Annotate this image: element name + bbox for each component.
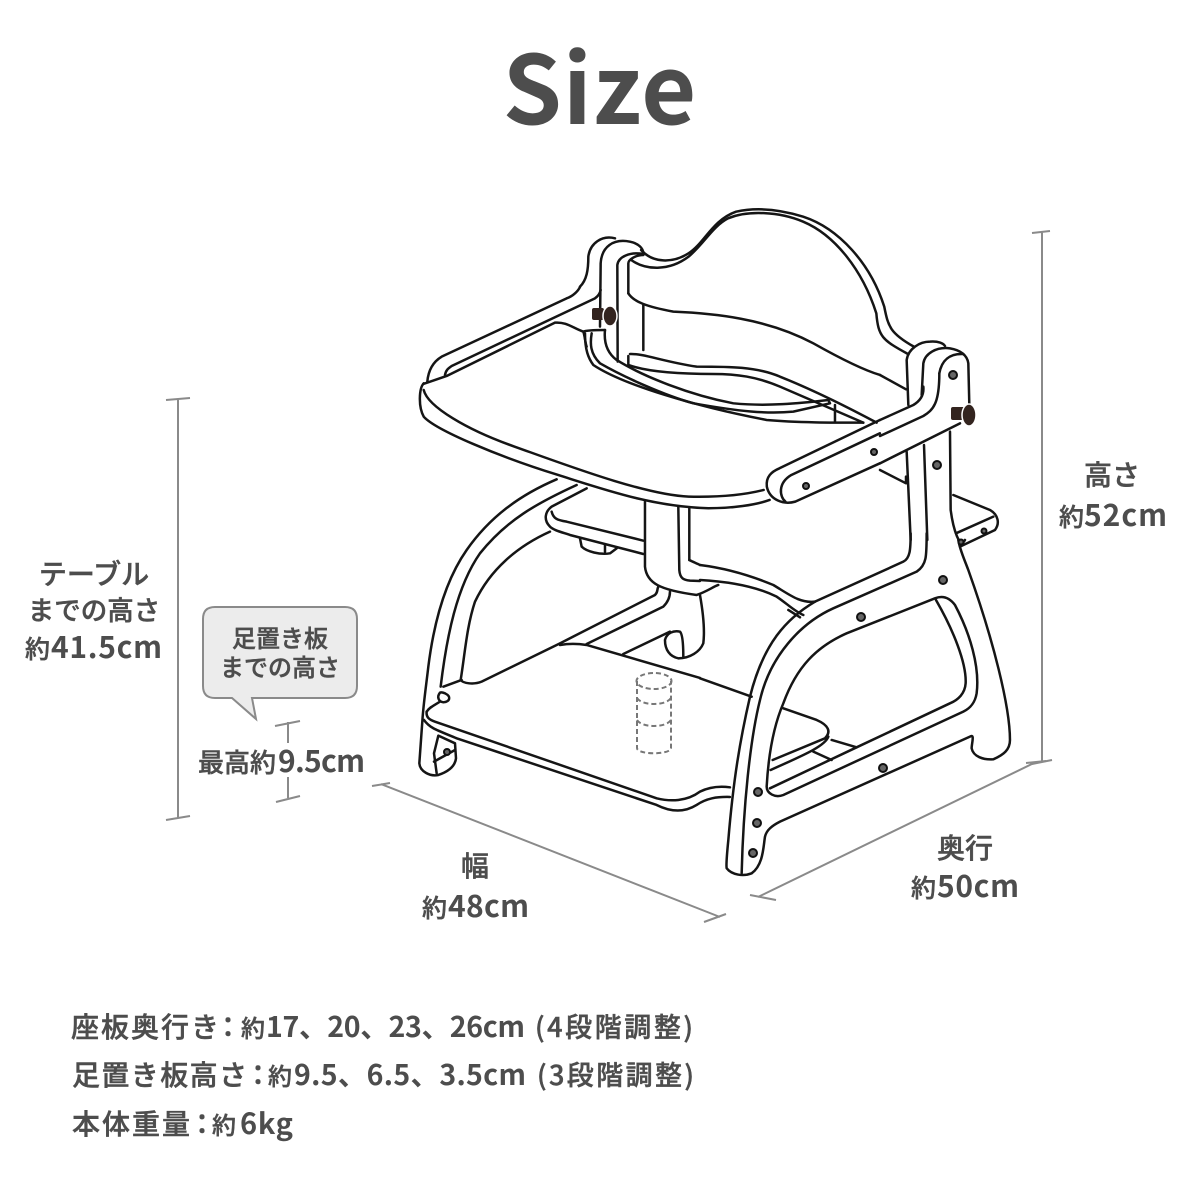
spec list line 1: 約 (241, 1009, 265, 1044)
spec list line 2: 9.5、6.5、3.5cm (294, 1053, 526, 1094)
right leg (700, 533, 1010, 875)
label: table height (25, 553, 162, 667)
label: table height: 約 (25, 630, 50, 666)
label: table height: までの高さ (28, 589, 160, 628)
backrest and tray outline (420, 209, 914, 508)
label: footboard max height: 9.5cm (278, 737, 365, 781)
right post and arm rail (880, 342, 998, 547)
label: width (422, 845, 529, 926)
label: depth: 奥行 (937, 827, 993, 867)
left post and seat belt (580, 238, 880, 423)
dimension line: width (372, 783, 726, 922)
label: depth: 50cm (937, 862, 1019, 906)
spec list line 2: 約 (268, 1057, 292, 1092)
left leg, center column and footboard (419, 479, 730, 811)
speech bubble (203, 607, 357, 719)
label: height: 高さ (1084, 454, 1140, 494)
title: Size (503, 15, 697, 152)
spec list line 2: (3段階調整) (537, 1054, 694, 1093)
spec list line 3: 約 (212, 1106, 236, 1141)
label: footboard max height: 最高約 (198, 743, 276, 780)
label: height: 52cm (1084, 491, 1167, 535)
label: width: 幅 (461, 845, 489, 885)
dimension line: depth (750, 761, 1046, 900)
dimension line: table height (166, 398, 190, 820)
spec list line 1: (4段階調整) (535, 1006, 693, 1045)
spec list line 3 (72, 1101, 293, 1143)
spec list line 2 (72, 1053, 694, 1094)
label: depth (911, 827, 1019, 906)
spec list line 3: ： (188, 1103, 216, 1143)
spec list line 3: 6kg (240, 1101, 293, 1143)
label: width: 約 (422, 889, 447, 925)
speech bubble: 足置き板 (232, 619, 328, 654)
dimension line: footboard height (275, 721, 300, 802)
spec list line 2: ： (244, 1054, 272, 1094)
chair line drawing (419, 209, 1010, 875)
label: table height: テーブル (39, 553, 149, 593)
spec list line 1 (71, 1005, 693, 1046)
label: width: 48cm (448, 882, 529, 926)
left arm rail (423, 287, 605, 384)
spec list line 1: 座板奥行き (71, 1006, 219, 1046)
spec list line 3: 本体重量 (72, 1103, 190, 1143)
dimension line: height (1032, 231, 1052, 764)
label: height: 約 (1059, 498, 1084, 534)
spec list line 1: 17、20、23、26cm (266, 1005, 525, 1046)
speech bubble: までの高さ (220, 648, 340, 683)
dashed footrest height cylinders (636, 673, 672, 753)
label: footboard max height (198, 737, 365, 781)
spec list line 2: 足置き板高さ (72, 1054, 247, 1094)
label: height (1059, 454, 1167, 535)
spec list line 1: ： (214, 1006, 242, 1046)
bolts (444, 371, 986, 857)
label: table height: 41.5cm (51, 623, 162, 667)
label: depth: 約 (911, 869, 936, 905)
adjustment knobs (592, 306, 976, 426)
